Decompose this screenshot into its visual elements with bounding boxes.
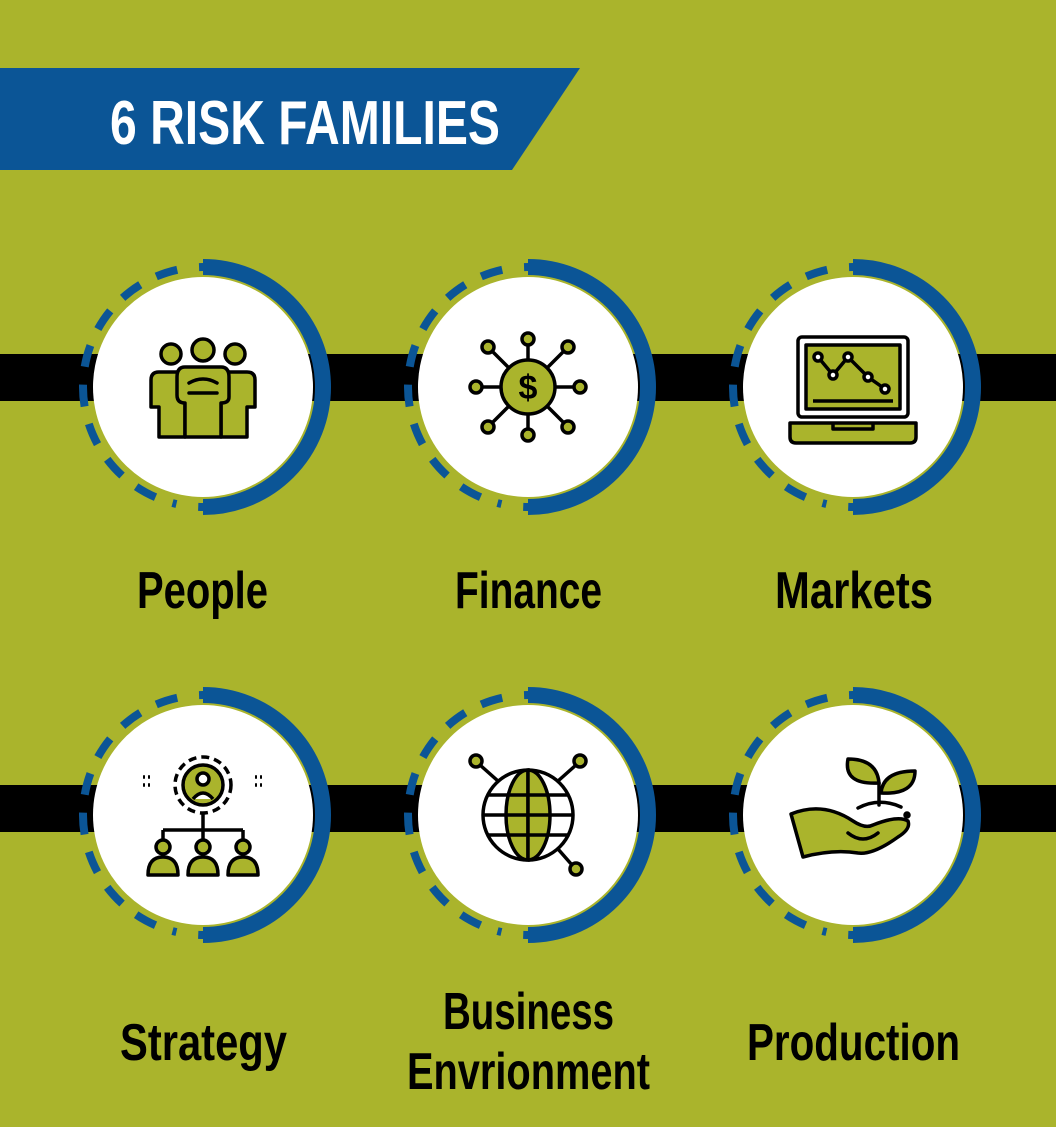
connector bar row 1	[0, 354, 1056, 401]
label: Business Envrionment: Business	[443, 983, 614, 1041]
circle: Strategy	[83, 695, 323, 935]
circle: People	[83, 267, 323, 507]
label: Finance: Finance	[455, 562, 602, 620]
icon: dollar network: $	[519, 369, 538, 407]
label: Strategy: Strategy	[120, 1014, 287, 1072]
title banner: 6 RISK FAMILIES	[110, 89, 500, 158]
icon: gear with team	[143, 757, 263, 875]
connector bar row 2	[0, 785, 1056, 832]
label: Business Envrionment	[407, 983, 650, 1101]
circle: Finance	[408, 267, 648, 507]
icon: laptop chart	[790, 337, 916, 443]
icon: dollar network	[470, 333, 586, 441]
circle: Markets	[733, 267, 973, 507]
icon: globe	[470, 755, 586, 875]
label: Markets: Markets	[775, 562, 933, 620]
label: People: People	[137, 562, 268, 620]
icon: people	[151, 339, 255, 437]
circle: Business Environment	[408, 695, 648, 935]
label: Production: Production	[747, 1014, 960, 1072]
title banner	[0, 68, 580, 170]
label: Business Envrionment: Envrionment	[407, 1043, 650, 1101]
circle: Production	[733, 695, 973, 935]
icon: hand with plant	[791, 759, 915, 857]
